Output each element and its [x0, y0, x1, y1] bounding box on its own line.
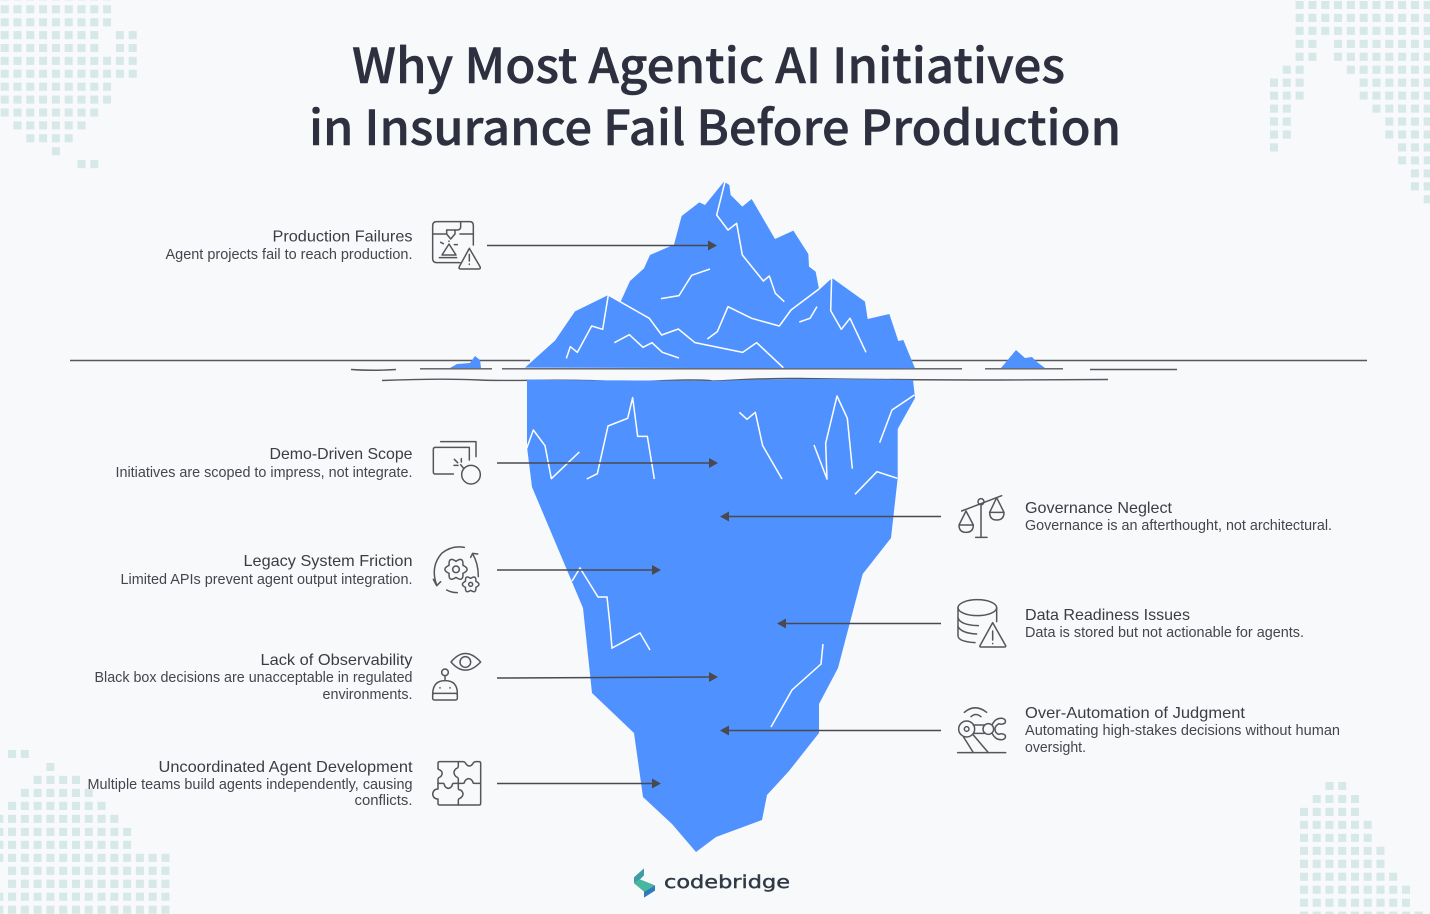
title: Why Most Agentic AI Initiatives — [352, 27, 1065, 97]
title: in Insurance Fail Before Production — [309, 89, 1121, 159]
label: governance neglect — [1025, 500, 1332, 534]
label: production failures: Agent projects fail to reach production. — [166, 247, 412, 263]
title — [309, 27, 1121, 159]
arrow: uncoordinated agent development — [497, 778, 661, 788]
label: data readiness issues: Data Readiness Issues — [1025, 607, 1190, 624]
arrow: over-automation of judgment — [720, 726, 941, 736]
label: demo-driven scope: Demo-Driven Scope — [270, 446, 413, 463]
label: lack of observability: Black box decisions are unacceptable in regulated — [94, 670, 413, 686]
label: legacy system friction — [120, 553, 412, 588]
dot pattern: bottom right — [1300, 786, 1428, 914]
label: governance neglect: Governance is an afterthought, not architectural. — [1025, 518, 1332, 534]
label: over-automation of judgment — [1025, 705, 1340, 756]
label: demo-driven scope: Initiatives are scoped to impress, not integrate. — [116, 465, 412, 481]
arrow: data readiness issues — [777, 618, 941, 628]
icon: demo screen with cursor — [433, 442, 480, 484]
icon: 3D printer with warning — [433, 222, 480, 269]
small iceberg left — [450, 356, 481, 368]
dot pattern: top left — [1, 0, 142, 164]
arrow: lack of observability — [497, 672, 718, 682]
icon: database with warning — [958, 600, 1006, 647]
logo: codebridge — [634, 868, 790, 898]
label: over-automation of judgment: Automating high-stakes decisions without human — [1025, 723, 1340, 739]
label: lack of observability: environments. — [322, 687, 412, 703]
label: uncoordinated agent development: Uncoordinated Agent Development — [158, 759, 413, 776]
small iceberg right — [1001, 350, 1045, 368]
dot pattern: top right — [1270, 5, 1430, 199]
label: production failures: Production Failures — [272, 228, 412, 246]
icon: gears with arrows — [433, 547, 479, 593]
label: over-automation of judgment: Over-Automation of Judgment — [1025, 705, 1246, 722]
label: over-automation of judgment: oversight. — [1025, 740, 1086, 756]
icon: puzzle pieces — [433, 762, 481, 805]
label: legacy system friction: Limited APIs prevent agent output integration. — [120, 572, 412, 588]
icon: balance scale — [959, 496, 1004, 537]
label: governance neglect: Governance Neglect — [1025, 500, 1173, 517]
arrow: production failures — [487, 240, 717, 250]
icon: robotic arm — [958, 708, 1006, 753]
label: legacy system friction: Legacy System Friction — [244, 553, 412, 570]
label: lack of observability — [94, 652, 413, 703]
label: lack of observability: Lack of Observability — [260, 652, 412, 669]
logo: codebridge: codebridge — [664, 873, 790, 893]
arrow: governance neglect — [720, 512, 941, 522]
label: data readiness issues: Data is stored but not actionable for agents. — [1025, 625, 1304, 641]
label: demo-driven scope — [116, 446, 413, 481]
label: uncoordinated agent development: conflicts. — [354, 793, 412, 809]
label: data readiness issues — [1025, 607, 1304, 641]
arrow: demo-driven scope — [497, 458, 718, 468]
label: production failures — [166, 228, 412, 263]
label: uncoordinated agent development: Multiple teams build agents independently, causing — [88, 777, 413, 793]
iceberg below water — [527, 379, 915, 852]
arrow: legacy system friction — [497, 565, 661, 575]
dot pattern: bottom left — [0, 754, 174, 910]
label: uncoordinated agent development — [88, 759, 413, 809]
iceberg above water — [525, 182, 915, 368]
icon: eye and robot — [433, 653, 481, 700]
water surface lines — [70, 360, 1367, 382]
